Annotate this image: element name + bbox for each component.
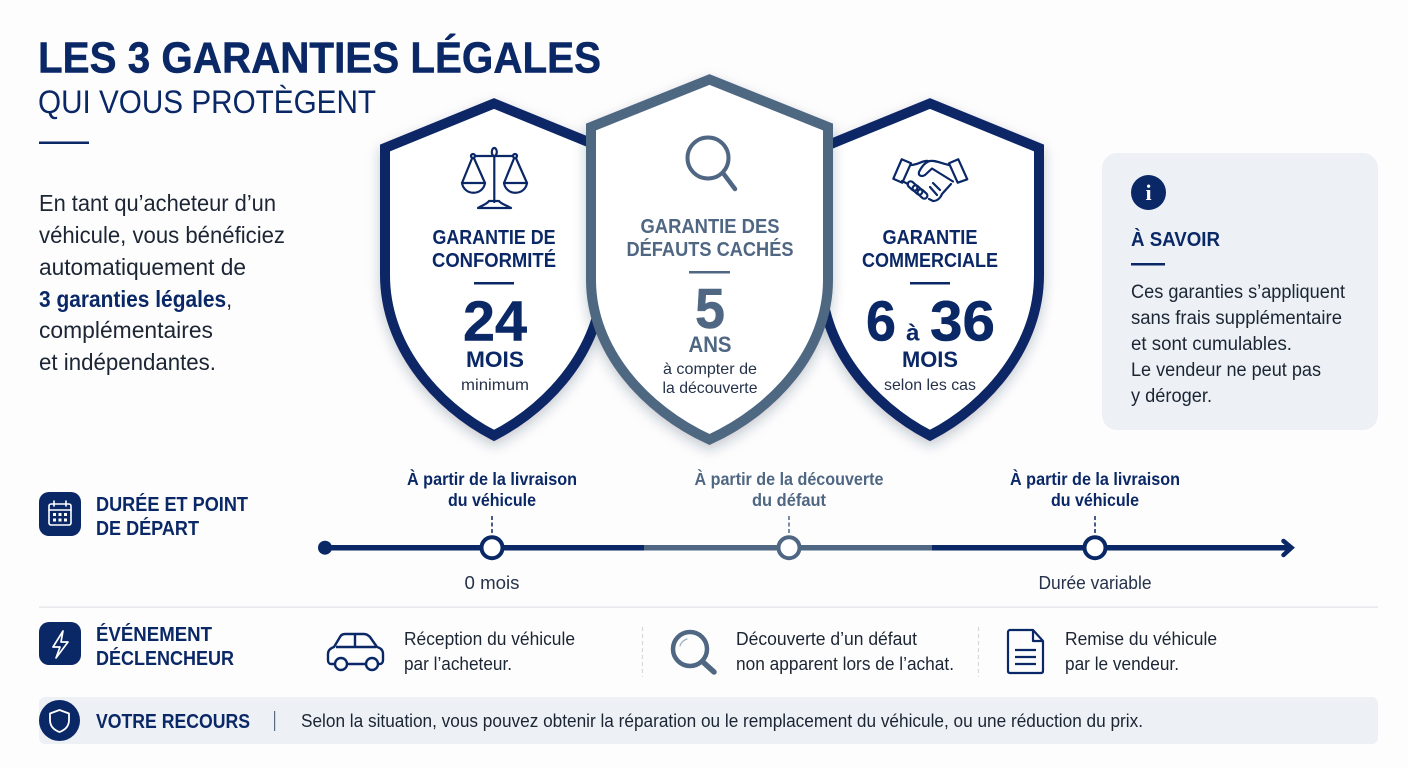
intro text bbox=[39, 190, 285, 375]
event: remise: par le vendeur. bbox=[1065, 654, 1179, 674]
intro text: 3 garanties légales, bbox=[39, 286, 232, 312]
timeline: À partir de la découverte bbox=[694, 468, 884, 489]
intro text: et indépendantes. bbox=[39, 349, 216, 375]
event: réception: Réception du véhicule bbox=[404, 629, 575, 649]
event: remise: Remise du véhicule bbox=[1065, 629, 1217, 649]
event: remise bbox=[1008, 629, 1217, 674]
intro text: véhicule, vous bénéficiez bbox=[39, 222, 285, 248]
shield: garantie des défauts cachés: la découverte bbox=[662, 380, 758, 397]
row label: événement déclencheur bbox=[39, 622, 234, 670]
shield: garantie commerciale: MOIS bbox=[902, 347, 958, 372]
timeline: du véhicule bbox=[1051, 490, 1139, 510]
shield: garantie des défauts cachés bbox=[591, 80, 828, 440]
event: réception bbox=[328, 629, 575, 674]
shield: garantie de conformité bbox=[385, 104, 603, 436]
shield: garantie de conformité: minimum bbox=[461, 377, 529, 394]
icon: magnifier bbox=[688, 138, 735, 189]
panel: à savoir: y déroger. bbox=[1131, 386, 1212, 407]
panel: à savoir: Le vendeur ne peut pas bbox=[1131, 360, 1321, 381]
shield: garantie commerciale: GARANTIE bbox=[882, 227, 978, 249]
shield: garantie commerciale: 6 bbox=[866, 290, 896, 354]
shield: garantie des défauts cachés: 5 bbox=[695, 277, 725, 341]
event: réception: par l’acheteur. bbox=[404, 654, 512, 674]
row label: événement déclencheur: DÉCLENCHEUR bbox=[96, 647, 234, 670]
band: votre recours: Selon la situation, vous pouvez obtenir la réparation ou le remplacement du véhicule, ou une réduction du prix. bbox=[301, 711, 1143, 731]
shield: garantie commerciale bbox=[821, 104, 1039, 436]
timeline bbox=[318, 468, 1292, 593]
timeline: À partir de la livraison bbox=[1010, 468, 1180, 489]
title: QUI VOUS PROTÈGENT bbox=[38, 84, 376, 120]
icon: car bbox=[328, 634, 383, 670]
intro text: complémentaires bbox=[39, 317, 213, 343]
icon: lightning bbox=[39, 622, 81, 665]
title bbox=[38, 32, 601, 144]
band: votre recours: VOTRE RECOURS bbox=[96, 710, 250, 733]
shield: garantie de conformité: GARANTIE DE bbox=[432, 227, 556, 249]
timeline: du véhicule bbox=[448, 490, 536, 510]
icon: magnifier bbox=[673, 632, 714, 672]
shield: garantie des défauts cachés: à compter de bbox=[663, 361, 757, 378]
timeline: 0 mois bbox=[464, 573, 520, 593]
icon: scales bbox=[462, 148, 527, 208]
timeline: du défaut bbox=[752, 490, 826, 510]
event: découverte: non apparent lors de l’achat. bbox=[736, 654, 954, 674]
arrow head bbox=[1284, 541, 1292, 555]
panel: à savoir: sans frais supplémentaire bbox=[1131, 308, 1342, 329]
shield: garantie des défauts cachés: ANS bbox=[688, 332, 732, 357]
timeline: À partir de la livraison bbox=[407, 468, 577, 489]
shield: garantie commerciale: selon les cas bbox=[884, 377, 976, 394]
shield: garantie de conformité: MOIS bbox=[466, 347, 524, 372]
icon: shield bbox=[39, 700, 80, 741]
event: découverte bbox=[673, 629, 954, 674]
shield: garantie commerciale: à bbox=[906, 320, 920, 346]
title: LES 3 GARANTIES LÉGALES bbox=[38, 32, 601, 82]
row label: durée et point de départ bbox=[39, 492, 248, 540]
shield: garantie des défauts cachés: GARANTIE DES bbox=[640, 216, 780, 238]
icon: handshake bbox=[893, 159, 967, 201]
shield: garantie de conformité: 24 bbox=[463, 290, 527, 354]
panel: à savoir bbox=[1102, 153, 1378, 430]
shield: garantie commerciale: 36 bbox=[930, 290, 995, 354]
panel: à savoir: et sont cumulables. bbox=[1131, 334, 1292, 355]
shield: garantie commerciale: COMMERCIALE bbox=[862, 250, 998, 272]
timeline: Durée variable bbox=[1038, 573, 1152, 593]
shield: garantie des défauts cachés: DÉFAUTS CACHÉS bbox=[626, 238, 794, 261]
row label: durée et point de départ: DURÉE ET POINT bbox=[96, 493, 248, 516]
row label: événement déclencheur: ÉVÉNEMENT bbox=[96, 623, 212, 646]
icon: info: i bbox=[1145, 180, 1152, 205]
intro text: En tant qu’acheteur d’un bbox=[39, 190, 276, 216]
panel: à savoir: Ces garanties s’appliquent bbox=[1131, 282, 1346, 303]
row label: durée et point de départ: DE DÉPART bbox=[96, 517, 199, 540]
shield: garantie de conformité: CONFORMITÉ bbox=[432, 249, 556, 272]
icon: calendar bbox=[39, 492, 81, 536]
event: découverte: Découverte d’un défaut bbox=[736, 629, 917, 649]
icon: info bbox=[1131, 175, 1166, 210]
band: votre recours bbox=[39, 697, 1378, 744]
intro text: automatiquement de bbox=[39, 254, 246, 280]
panel: à savoir: À SAVOIR bbox=[1131, 228, 1220, 251]
icon: document bbox=[1008, 630, 1043, 673]
